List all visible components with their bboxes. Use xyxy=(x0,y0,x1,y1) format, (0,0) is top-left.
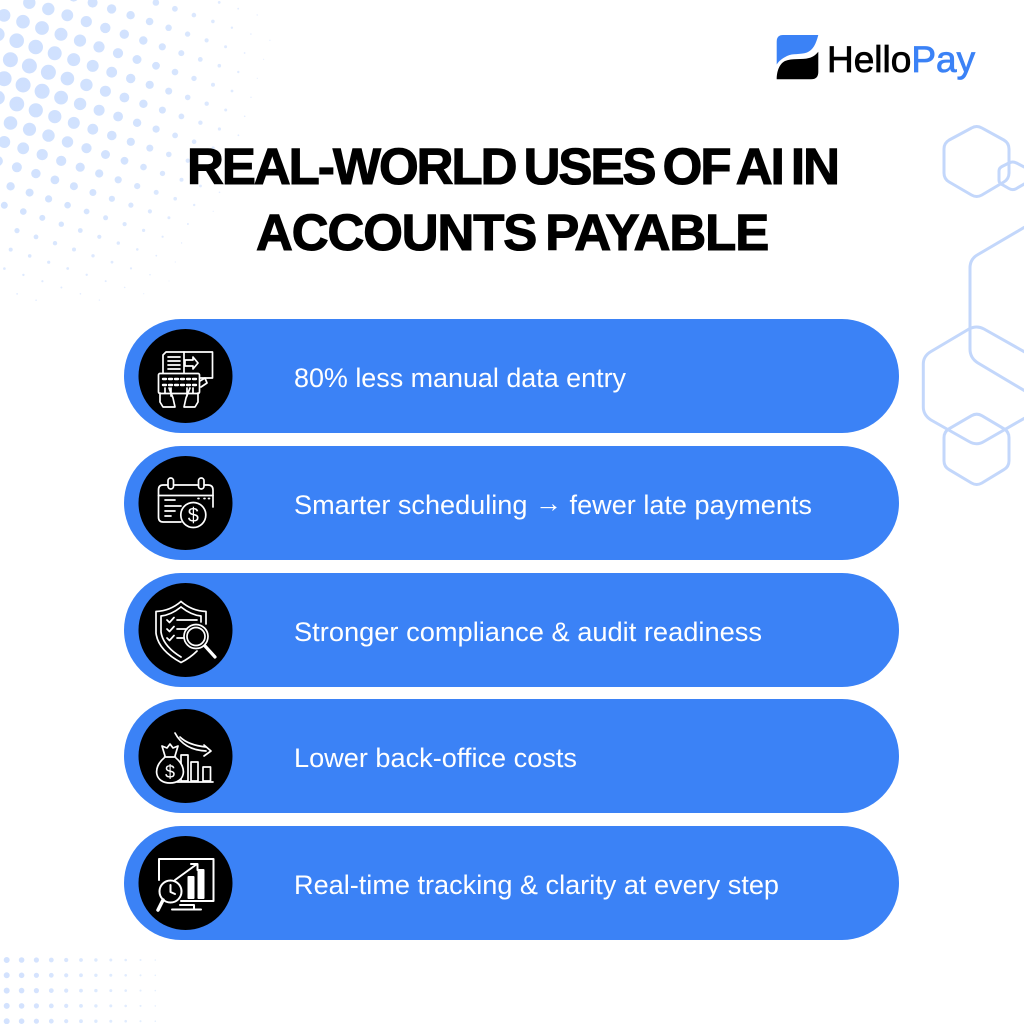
halftone dot pattern: top left xyxy=(0,0,271,301)
panel: back-office costs xyxy=(124,699,899,813)
row text: Smarter scheduling xyxy=(294,490,527,520)
icon: shield with magnifier xyxy=(156,602,215,662)
row text: Real-time tracking & clarity at every step xyxy=(294,870,779,900)
panel: manual data entry xyxy=(124,319,899,433)
title: ACCOUNTS PAYABLE xyxy=(256,204,768,261)
icon: monitor with chart and magnifier xyxy=(158,859,214,910)
dot grid: bottom left xyxy=(7,960,155,1024)
title: REAL-WORLD USES OF AI IN xyxy=(187,138,838,195)
icon: calendar with dollar coin: $ xyxy=(188,505,199,527)
logo wordmark: HelloPay xyxy=(827,39,976,80)
icon: calendar with dollar coin xyxy=(158,478,213,528)
panel: compliance and audit xyxy=(124,573,899,687)
icon: money bag and falling bars: $ xyxy=(165,762,175,782)
row text: fewer late payments xyxy=(562,490,812,520)
logo: HelloPay xyxy=(777,35,976,80)
icon: keyboard and document xyxy=(158,352,212,407)
row text: Lower back-office costs xyxy=(294,743,577,773)
panel: real-time tracking xyxy=(124,826,899,940)
row text: Stronger compliance & audit readiness xyxy=(294,617,762,647)
panel: smarter scheduling xyxy=(124,446,899,560)
logo mark xyxy=(777,35,818,79)
row text: → xyxy=(535,488,562,518)
hexagon outlines: right side xyxy=(923,126,1024,484)
row text: 80% less manual data entry xyxy=(294,363,626,393)
icon: money bag and falling bars xyxy=(157,733,213,783)
title xyxy=(187,138,838,261)
